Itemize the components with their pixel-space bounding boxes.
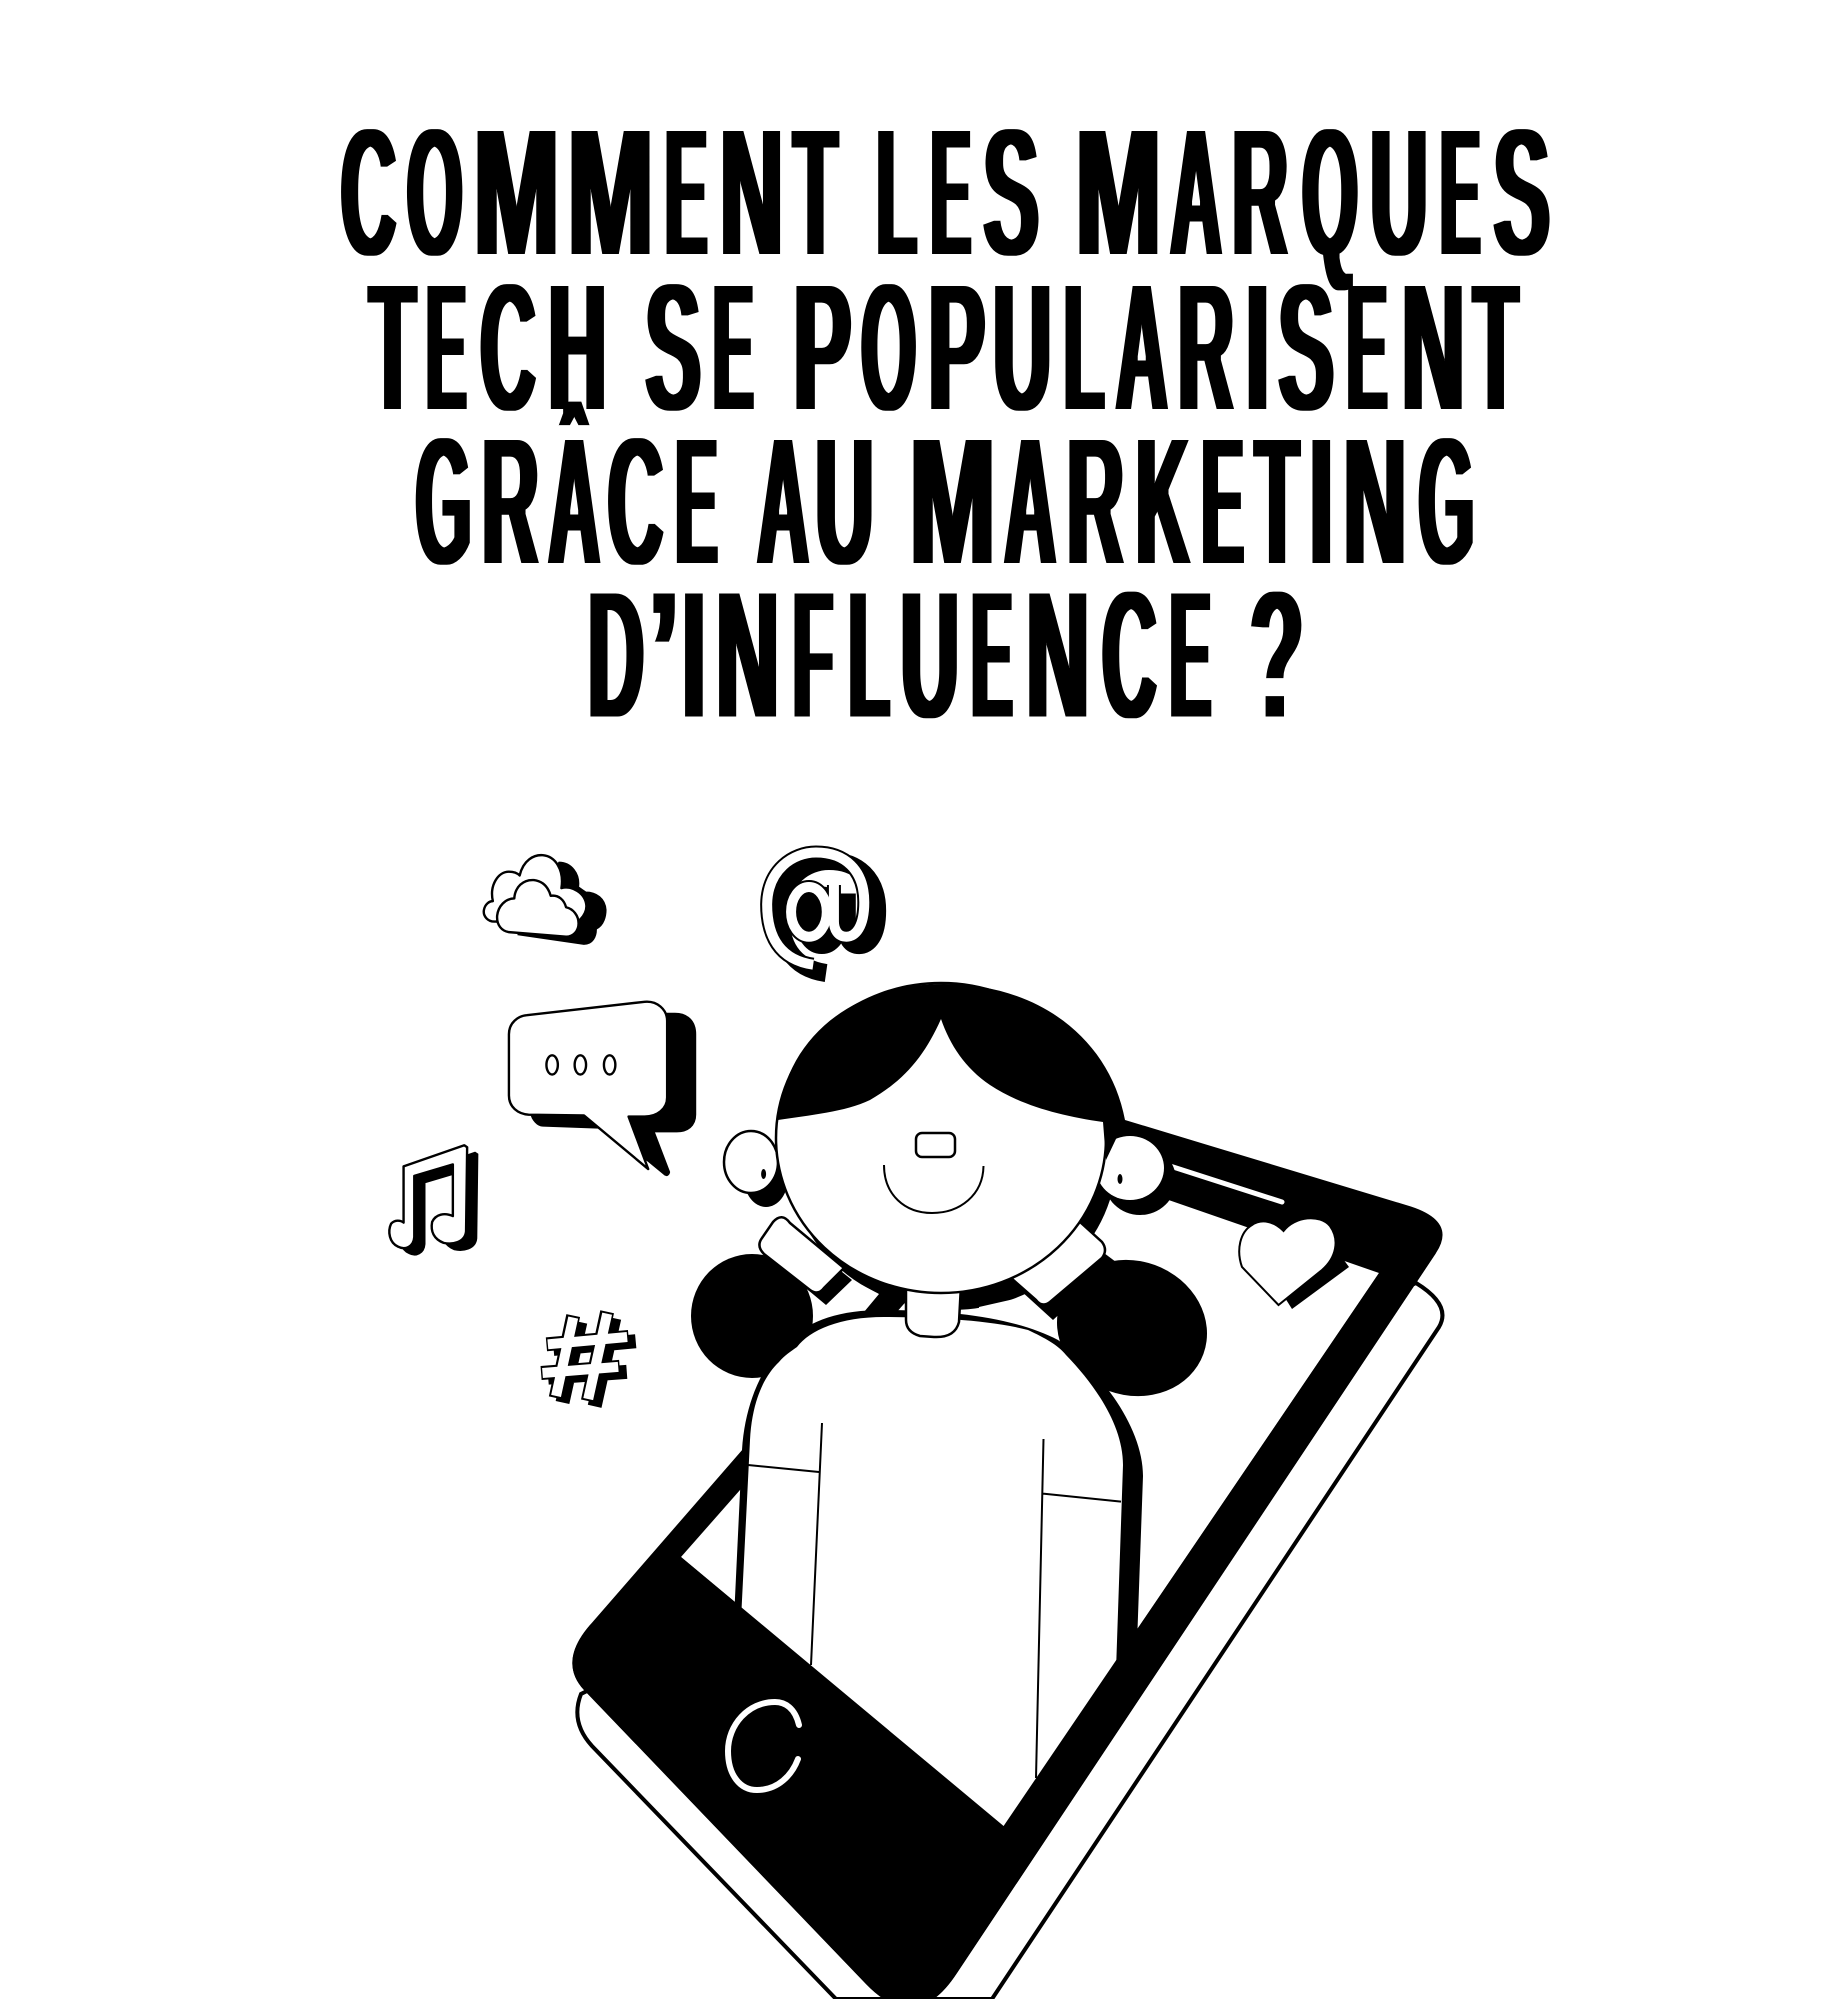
title: U	[816, 399, 873, 605]
icon: at sign	[767, 853, 877, 973]
phone back outline	[577, 1283, 1442, 1999]
title: T	[370, 245, 416, 451]
title: U	[901, 552, 959, 758]
gaps beside neck	[824, 1285, 1058, 1340]
smile	[884, 1165, 984, 1213]
title: A	[1004, 399, 1056, 605]
title: E	[665, 90, 707, 296]
phone body	[572, 1097, 1443, 1999]
phone screen	[681, 1154, 1379, 1826]
title: M	[910, 399, 995, 605]
title: L	[1064, 245, 1104, 451]
title: D	[588, 552, 644, 758]
title: L	[877, 90, 916, 296]
icon: speech bubble	[509, 1002, 696, 1176]
title: E	[1202, 399, 1243, 605]
title: N	[1402, 245, 1464, 451]
title: P	[929, 245, 985, 451]
title: E	[713, 245, 753, 451]
title: O	[861, 245, 916, 451]
title: T	[1255, 399, 1299, 605]
left hair tie	[759, 1217, 852, 1305]
title: E	[931, 90, 971, 296]
head shadow	[787, 1000, 1117, 1310]
title: E	[972, 552, 1012, 758]
illustration: person in smartphone	[572, 983, 1443, 1999]
left pigtail	[691, 1254, 813, 1378]
title: S	[645, 245, 701, 451]
right hair tie	[1011, 1222, 1116, 1320]
title: N	[716, 552, 779, 758]
title: U	[993, 245, 1051, 451]
title: M	[568, 90, 653, 296]
title: T	[794, 90, 837, 296]
text: S	[1494, 90, 1550, 296]
title: N	[1344, 399, 1406, 605]
title: N	[1026, 552, 1089, 758]
logo C	[728, 1702, 799, 1790]
phone chin and right frame	[572, 1253, 1436, 1999]
title: I	[683, 552, 705, 758]
title: U	[1370, 90, 1427, 296]
title: R	[1232, 90, 1288, 296]
title: M	[1076, 90, 1161, 296]
hair	[778, 984, 1125, 1160]
heart	[1239, 1218, 1349, 1309]
title: C	[341, 90, 396, 296]
face	[776, 983, 1106, 1293]
title: R	[1067, 399, 1124, 605]
title: E	[1170, 552, 1211, 758]
nose	[916, 1133, 955, 1157]
title: R	[482, 399, 539, 605]
title: I	[1246, 245, 1269, 451]
title: S	[983, 90, 1039, 296]
title: O	[407, 90, 462, 296]
title: F	[793, 552, 833, 758]
icon: music note	[389, 1145, 478, 1255]
title: G	[416, 399, 471, 605]
title: S	[1278, 245, 1334, 451]
title: E	[676, 399, 717, 605]
phone speaker bar	[1170, 1166, 1282, 1202]
title: ’	[649, 552, 679, 758]
title: A	[1116, 245, 1168, 451]
neck	[906, 1285, 961, 1337]
left ear	[724, 1131, 788, 1207]
title: A	[757, 399, 809, 605]
right pigtail	[1038, 1239, 1226, 1417]
sleeve lines	[748, 1423, 1121, 1778]
title: I	[1310, 399, 1332, 605]
title: M	[474, 90, 559, 296]
title	[341, 90, 1550, 758]
title: E	[1347, 245, 1387, 451]
title: P	[794, 245, 851, 451]
title: T	[1474, 245, 1518, 451]
title: C	[1102, 552, 1157, 758]
title: N	[720, 90, 783, 296]
title: C	[480, 245, 536, 451]
title: R	[1178, 245, 1234, 451]
icon: hashtag	[541, 1312, 636, 1406]
title: G	[1419, 399, 1474, 605]
title: E	[426, 245, 466, 451]
title: Â	[548, 399, 600, 605]
right ear	[1096, 1136, 1176, 1215]
title: C	[608, 399, 663, 605]
body outline	[733, 1310, 1143, 1835]
title: Q	[1302, 90, 1358, 296]
title: L	[849, 552, 889, 758]
title: A	[1170, 90, 1222, 296]
title: H	[548, 245, 606, 451]
title: K	[1136, 399, 1190, 605]
title: ?	[1250, 552, 1304, 758]
title: E	[1440, 90, 1480, 296]
body	[740, 1317, 1123, 1835]
icon: cloud	[484, 855, 606, 944]
